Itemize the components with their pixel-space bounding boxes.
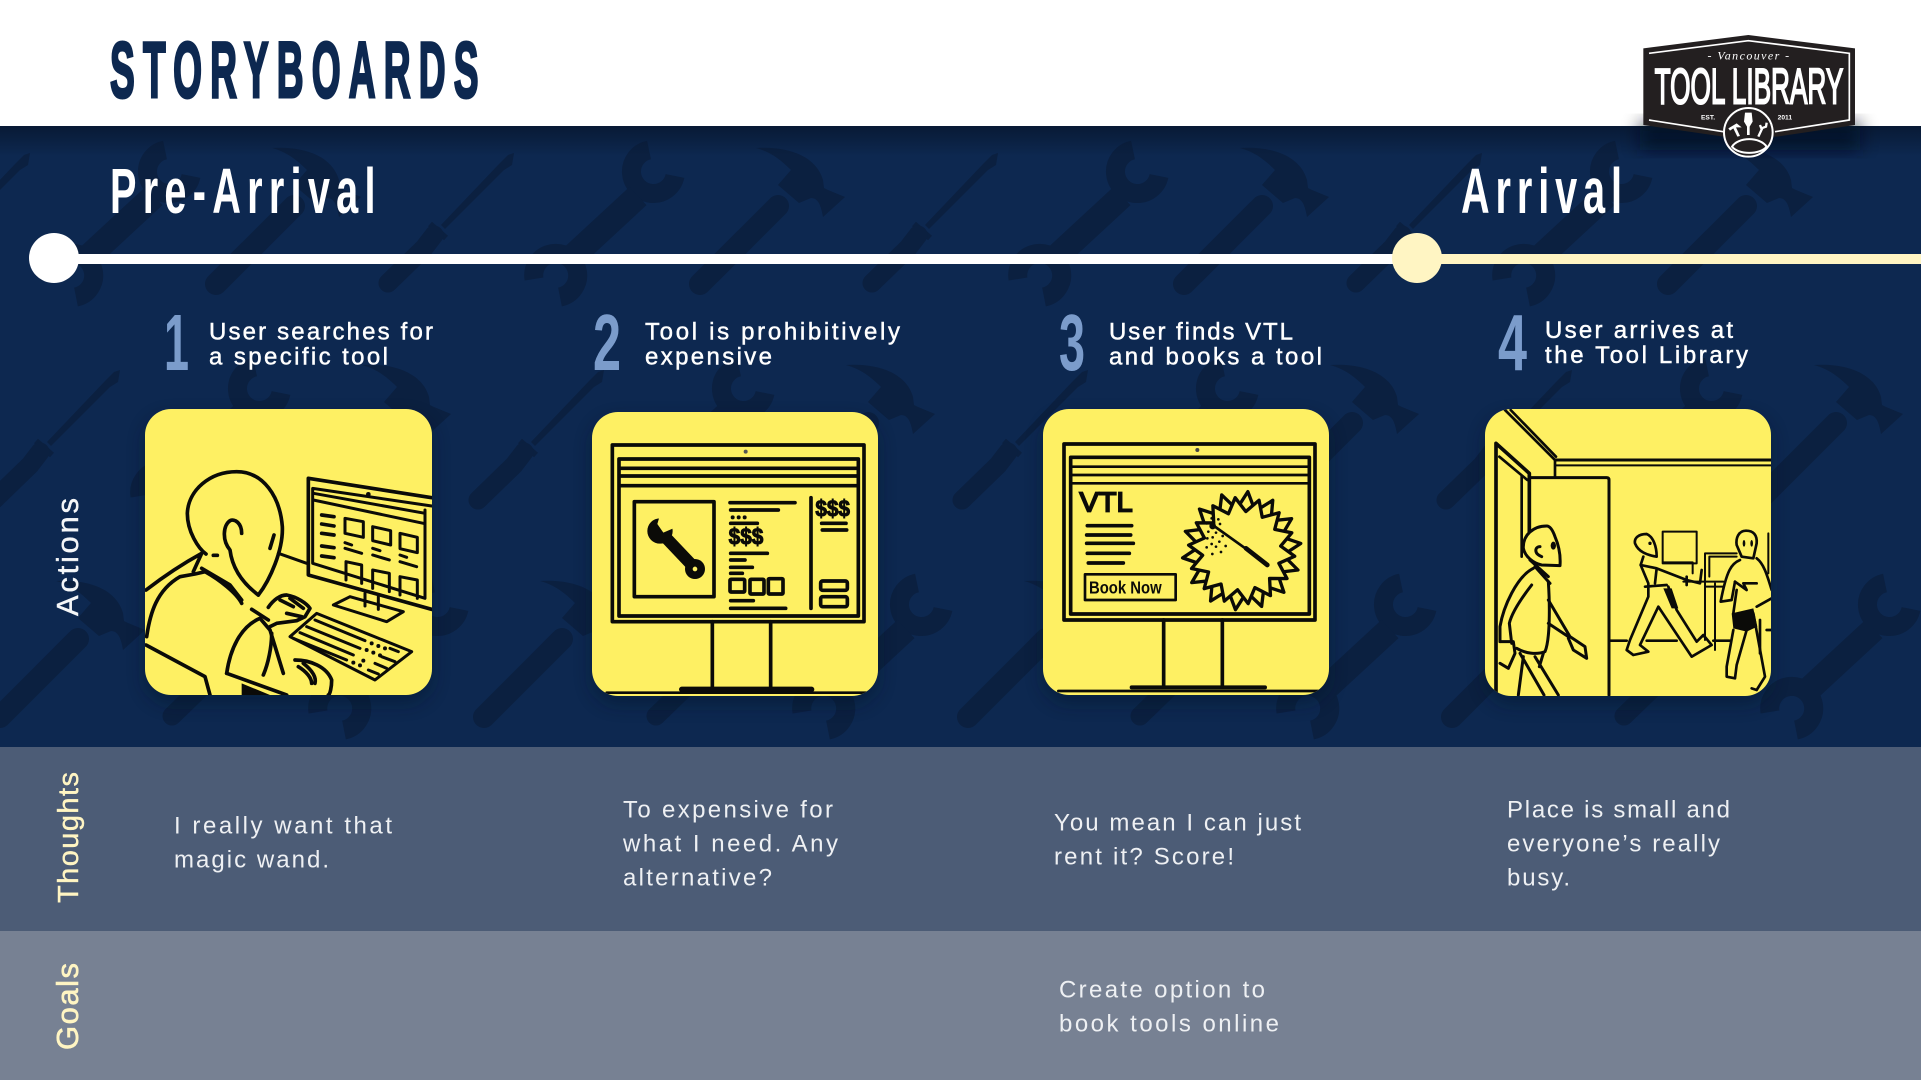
step 3 heading (1059, 298, 1322, 387)
step 3 text (1109, 318, 1322, 370)
timeline (29, 233, 1921, 283)
thought 1: magic wand. (174, 846, 329, 874)
thought 3: You mean I can just (1054, 810, 1301, 836)
thought 3 (1054, 810, 1301, 870)
goals background (0, 931, 1921, 1080)
row label: Goals: Goals (50, 963, 85, 1050)
illustration: user at computer searching (145, 409, 432, 695)
thought 4: busy. (1507, 864, 1570, 892)
panel: goals row (0, 931, 1921, 1080)
step 4 text: User arrives at (1545, 317, 1733, 344)
timeline node: arrival start (1392, 233, 1442, 283)
thought 3: rent it? Score! (1054, 844, 1234, 870)
goal text: book tools online (1059, 1010, 1279, 1038)
tool pattern background (0, 126, 1921, 730)
timeline segment: arrival (1417, 254, 1921, 264)
row label: Actions: Actions (50, 498, 85, 616)
book now button label: Book Now (1089, 577, 1162, 597)
panel 4 shadow (1485, 417, 1771, 704)
thought 2: To expensive for (623, 796, 833, 824)
panel: actions background (0, 126, 1921, 747)
logo: Vancouver Tool Library (1643, 35, 1855, 157)
logo inner border (1649, 41, 1849, 132)
step number 1: 1 (164, 298, 189, 387)
timeline segment: pre-arrival (54, 254, 1417, 264)
step 1 text (209, 318, 433, 370)
step 1 text: a specific tool (209, 344, 388, 370)
logo emblem (1724, 108, 1773, 157)
panel: thoughts row (0, 747, 1921, 931)
thought 4: Place is small and (1507, 796, 1730, 824)
thought 1: I really want that (174, 812, 392, 840)
logo shadow (1640, 122, 1860, 150)
section heading: Arrival: Arrival (1461, 157, 1628, 227)
thought 2 (622, 796, 838, 892)
office furniture (1663, 532, 1768, 650)
starburst with magic wand (1180, 490, 1302, 612)
step 4 text: the Tool Library (1545, 342, 1748, 369)
step 2 text: expensive (645, 344, 772, 370)
staff member carrying box (1627, 534, 1712, 657)
step 2 text (645, 318, 900, 370)
step 3 text: and books a tool (1109, 344, 1322, 370)
step 4 text (1545, 317, 1748, 369)
thought 2: alternative? (623, 864, 772, 892)
goal text (1059, 976, 1279, 1038)
illustration: monitor showing VTL booking page (1043, 409, 1329, 695)
logo est: EST. (1701, 115, 1715, 122)
logo badge (1643, 35, 1855, 137)
VTL logotype: VTL (1079, 486, 1133, 517)
step 4 heading (1498, 298, 1748, 387)
timeline node: pre-arrival start (29, 233, 79, 283)
monitor (278, 478, 432, 622)
header background (0, 0, 1921, 126)
step 2 heading (593, 298, 900, 387)
thought 4 (1507, 796, 1730, 892)
person (146, 472, 332, 695)
illustration: monitor showing expensive tool (592, 412, 878, 696)
monitor frame (607, 445, 867, 693)
price text: $$$ (729, 523, 764, 549)
step number 2: 2 (593, 298, 621, 387)
step 1 heading (164, 298, 433, 387)
step number 3: 3 (1059, 298, 1085, 387)
keyboard (290, 613, 412, 680)
step 3 text: User finds VTL (1109, 318, 1293, 346)
thoughts background (0, 747, 1921, 931)
wrench icon (647, 515, 705, 579)
step 2 text: Tool is prohibitively (645, 318, 900, 346)
thought 1 (174, 812, 392, 874)
logo year: 2011 (1778, 115, 1792, 122)
panel 3 shadow (1043, 417, 1329, 703)
room architecture (1496, 410, 1772, 695)
section heading: Pre-Arrival: Pre-Arrival (110, 157, 382, 227)
title: STORYBOARDS (110, 27, 487, 115)
thought 4: everyone’s really (1507, 830, 1720, 858)
logo script: - Vancouver - (1707, 48, 1789, 62)
product listing lines (730, 498, 847, 608)
panel 1 shadow (145, 417, 432, 703)
step 1 text: User searches for (209, 318, 433, 346)
goal text: Create option to (1059, 976, 1265, 1004)
price text right: $$$ (815, 495, 850, 521)
panel 2 shadow (592, 420, 878, 704)
thought 2: what I need. Any (622, 830, 838, 858)
person entering (1500, 526, 1587, 695)
monitor frame (1058, 444, 1318, 691)
row label: Thoughts: Thoughts (53, 772, 85, 903)
step number 4: 4 (1498, 298, 1527, 387)
staff member standing (1721, 531, 1772, 690)
illustration: user arriving at tool library (1485, 409, 1772, 696)
